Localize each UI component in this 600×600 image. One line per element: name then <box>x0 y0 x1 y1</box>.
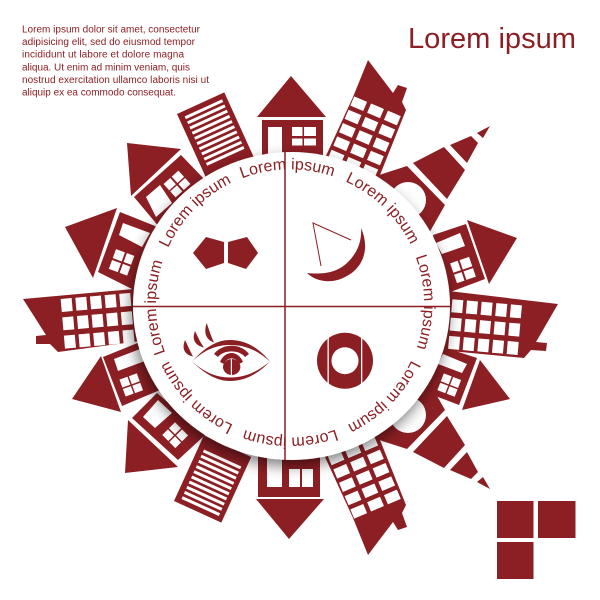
quadrant cross lines <box>133 152 450 460</box>
building: right upper house <box>433 220 517 294</box>
building: right lower house <box>425 345 510 410</box>
building: top house <box>257 76 326 160</box>
text block: intro paragraph: Lorem ipsum dolor sit amet, consectetur <box>22 24 201 36</box>
building: bottom left striped block <box>174 435 251 523</box>
panel: central white disc with shadow <box>133 152 450 460</box>
title: Lorem ipsum <box>408 23 576 55</box>
label: bottom: Lorem ipsum <box>244 430 338 449</box>
building: left wide block <box>23 288 148 352</box>
building: lower left house <box>72 340 160 412</box>
building: left upper house <box>65 208 160 292</box>
building: bottom house <box>256 452 324 539</box>
building: bottom right spire <box>370 375 490 489</box>
icon: crescent and angle <box>307 223 365 281</box>
label: upper left: Lorem ipsum <box>158 176 231 247</box>
text block: intro paragraph: incididunt ut labore et dolore magna <box>22 50 184 61</box>
building: top right spire <box>370 126 490 240</box>
building: top left striped block <box>177 92 254 180</box>
building: lower left house near bottom <box>125 393 205 473</box>
building: right wide block <box>440 290 558 358</box>
building: top right tower <box>325 60 407 180</box>
label: top: Lorem ipsum <box>240 158 334 178</box>
label: left: Lorem ipsum <box>144 260 165 356</box>
icon: three squares <box>497 501 576 579</box>
label: lower left: Lorem ipsum <box>162 362 232 434</box>
label: lower right: Lorem ipsum <box>348 361 421 432</box>
buildings ring <box>23 60 558 555</box>
icon: bow tie pentagons <box>193 237 258 269</box>
text block: intro paragraph: aliquip ex ea commodo consequat. <box>22 88 176 99</box>
text block: intro paragraph <box>22 24 209 99</box>
circular labels ring <box>144 158 436 449</box>
building: bottom right tower <box>325 435 407 555</box>
icon: ring with vertical lines <box>317 333 373 389</box>
label: upper right: Lorem ipsum <box>346 172 417 244</box>
text block: intro paragraph: aliqua. Ut enim ad minim veniam, quis <box>22 62 190 73</box>
building: upper left house <box>127 143 205 228</box>
text block: intro paragraph: adipisicing elit, sed do eiusmod tempor <box>22 37 196 48</box>
icon: eye with lashes <box>184 323 270 381</box>
label: right: Lorem ipsum <box>416 254 436 349</box>
text block: intro paragraph: nostrud exercitation ullamco laboris nisi ut <box>22 75 209 86</box>
